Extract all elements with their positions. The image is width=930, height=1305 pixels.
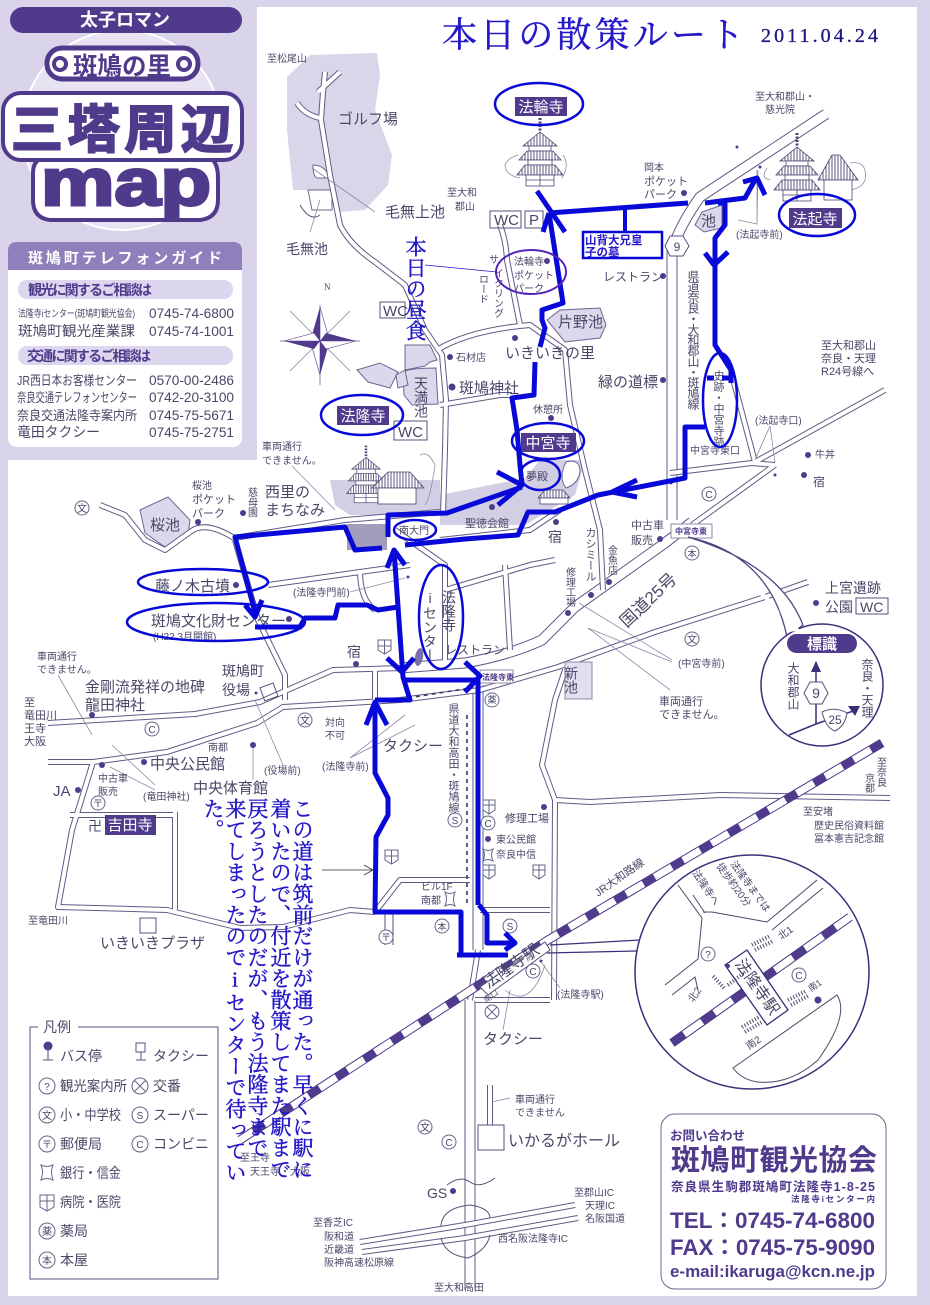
label: Horinji: 法輪寺 <box>518 99 564 116</box>
legend: hospital <box>40 1194 121 1211</box>
panel: contact box: 法隆寺iセンター内 <box>791 1194 875 1204</box>
map labels: north-centre: ポケット <box>644 175 688 188</box>
sightseeing enquiries: 観光に関するご相談は <box>28 282 152 298</box>
map labels: north-east: R24号線へ <box>821 365 874 378</box>
panel: contact box: 奈良県生駒郡斑鳩町法隆寺1-8-25 <box>671 1179 875 1194</box>
map labels: Chuguji east and Route 25: 販売 <box>631 534 653 547</box>
map labels: north-centre: P <box>529 212 539 229</box>
map labels: Chuguji east and Route 25: 本 <box>687 548 697 559</box>
map labels: west: 慈母園 <box>246 486 258 518</box>
map labels: west: 役場 <box>222 682 250 698</box>
map labels: north-east: 県道奈良・大和郡山・斑鳩線 <box>686 270 700 410</box>
map labels: Chuguji east and Route 25: レストラン <box>445 643 505 657</box>
map labels: west: まちなみ <box>265 502 325 519</box>
map labels: north-centre: サ <box>486 254 498 264</box>
badge: 斑鳩の里 <box>47 48 198 81</box>
map labels: south-centre: GS <box>427 1185 447 1201</box>
map labels: south-centre: 阪和道 <box>324 1230 354 1243</box>
legend: convenience store: コンビニ <box>153 1136 209 1152</box>
map labels: north-west <box>267 52 519 441</box>
banner: 太子ロマン <box>10 7 242 33</box>
map labels: Chuguji east and Route 25: 薬 <box>487 694 497 705</box>
route stop ring: Chuguji <box>512 423 584 459</box>
transport enquiries: 0745-75-2751 <box>149 424 234 440</box>
callout: road sign inset: 大和郡山 <box>786 662 800 710</box>
map labels: Horyuji precinct: iセンター <box>422 590 438 662</box>
banner: 太子ロマン: 太子ロマン <box>80 10 170 30</box>
map labels: north-east: 至大和郡山 <box>821 338 876 352</box>
map labels: west: 竜田川 <box>24 709 57 722</box>
railway: JR Yamatoji line <box>240 743 882 1140</box>
map labels: north-centre: レストラン <box>603 270 663 284</box>
map labels: north-east: 池 <box>701 213 716 230</box>
title: map: map <box>41 145 211 219</box>
map labels: north-centre: 法輪寺 <box>514 256 544 268</box>
map labels: south-west: 対向 <box>325 716 345 729</box>
map labels: north-east: C <box>705 490 713 501</box>
sightseeing enquiries: 法隆寺iセンター(斑鳩町観光協会) <box>18 307 135 320</box>
map labels: Chuguji east and Route 25: 中古車 <box>631 518 664 532</box>
legend: bookstore <box>39 1252 88 1268</box>
map labels: west: 南都 <box>208 741 228 754</box>
map labels: south-centre: 南都 <box>421 894 441 907</box>
panel: contact box: お問い合わせ <box>670 1128 745 1143</box>
map labels: north-west: WC <box>398 424 423 441</box>
map labels: west: C <box>148 725 156 736</box>
panel: contact box: TEL：0745-74-6800 <box>670 1208 875 1233</box>
map labels: north-centre: イクリング <box>492 268 504 318</box>
temple illustration: Horyuji pagoda and hall <box>347 446 435 505</box>
transport enquiries: 奈良交通テレフォンセンター <box>17 390 137 405</box>
map labels: Chuguji east and Route 25 <box>445 504 888 721</box>
map labels: south-centre: ビル1F <box>421 881 453 893</box>
map labels: north-centre <box>476 161 688 483</box>
legend: pharmacy: 薬局 <box>60 1223 88 1239</box>
panel: contact box: FAX：0745-75-9090 <box>670 1235 875 1260</box>
legend: pharmacy: 薬 <box>42 1226 52 1238</box>
map labels: south-west: 至竜田川 <box>28 915 68 927</box>
route stop ring: Fujinoki tumulus <box>138 569 268 595</box>
map labels: north-east: 慈光院 <box>765 103 795 116</box>
callout: Horyuji station inset: ? <box>705 950 711 961</box>
map labels: west: 文 <box>300 714 310 727</box>
walking route: blue hand-drawn path <box>235 178 765 955</box>
map labels: Chuguji east and Route 25: カシミール <box>584 527 596 582</box>
callout: Horyuji station inset: 徒歩約20分 <box>714 860 754 909</box>
sightseeing enquiries <box>18 280 234 339</box>
legend: hospital: 病院・医院 <box>60 1194 121 1210</box>
map labels: north-east: (法起寺口) <box>755 415 802 427</box>
map labels: north-west: 斑鳩神社 <box>459 380 519 397</box>
annotation: Prince Yamashiro no Oe tomb <box>583 208 662 259</box>
map labels: north-east: 中宮寺東口 <box>690 444 740 457</box>
map labels: Chuguji east and Route 25: できません。 <box>659 708 725 721</box>
map labels: Chuguji east and Route 25: (中宮寺前) <box>678 657 725 670</box>
map labels: north-centre: WC <box>494 212 519 229</box>
map labels: south-west: いきいきプラザ <box>100 935 205 952</box>
sign title <box>787 634 857 653</box>
route stop ring: Chuguji ruins <box>703 353 737 447</box>
map labels: south-west <box>28 700 443 952</box>
legend: convenience store: C <box>136 1140 144 1151</box>
map labels: north-west: ゴルフ場 <box>338 110 398 128</box>
annotation: today's lunch <box>403 236 497 341</box>
label: Chuguji: 中宮寺 <box>525 435 571 452</box>
annotation: walking note: 着いたので、付近を散策してまた駅まで <box>268 798 292 1180</box>
sightseeing enquiries: 0745-74-1001 <box>149 323 234 339</box>
map labels: west: 大阪 <box>24 734 46 748</box>
route stop ring: lunch pocket park <box>496 250 566 294</box>
map labels: south-centre: 近畿道 <box>324 1243 354 1256</box>
map labels: west: 桜池 <box>150 517 180 534</box>
panel: contact box: 斑鳩町観光協会 <box>671 1144 877 1177</box>
legend: pharmacy <box>39 1223 88 1239</box>
map labels: Chuguji east and Route 25: 金魚店 <box>606 544 618 576</box>
map labels: south-centre: 至郡山IC <box>574 1187 614 1199</box>
map labels: south-centre: いかるがホール <box>508 1132 620 1150</box>
route stop ring: Horinji <box>495 83 583 125</box>
map labels: Chuguji east and Route 25: 修理工場 <box>564 566 576 608</box>
route stop ring: Yumedono <box>520 460 560 490</box>
legend: bank <box>41 1165 121 1181</box>
annotation: walking note: 戻ろうとしたのだが、もう法隆寺まで <box>245 798 269 1158</box>
map labels: west: できません。 <box>37 664 97 676</box>
annotation: today's lunch: 本日の昼食 <box>403 236 427 341</box>
map labels: west: 藤ノ木古墳 <box>155 578 230 595</box>
map labels: south-west: 〒 <box>93 799 103 810</box>
compass rose <box>280 282 360 385</box>
panel: legend <box>30 1019 218 1279</box>
legend: taxi: タクシー <box>153 1048 209 1064</box>
legend: post office <box>39 1136 102 1152</box>
callout: Horyuji station inset: 北2 <box>686 985 705 1005</box>
map labels: west: パーク <box>192 507 225 520</box>
map labels: south-centre: 至奈良 <box>874 757 886 788</box>
callout: Horyuji station inset: 法隆寺へ <box>690 867 723 908</box>
map labels: west: 桜池 <box>192 479 212 492</box>
legend: post office: 郵便局 <box>60 1136 102 1152</box>
map labels: south-west: 販売 <box>98 785 118 798</box>
map labels: west: 車両通行 <box>37 650 77 663</box>
map labels: Horyuji precinct: 宿 <box>347 644 361 660</box>
map labels: south-west: (竜田神社) <box>143 790 190 803</box>
map labels: north-west: 郡山 <box>455 201 475 213</box>
label: Hokiji: 法起寺 <box>792 211 838 228</box>
legend: bookstore: 本 <box>42 1254 52 1267</box>
guide header: 斑鳩町テレフォンガイド <box>28 249 222 267</box>
map labels: south-west: 卍 <box>88 818 102 834</box>
map labels: north-east: 9 <box>674 240 681 254</box>
label: Horyuji: 法隆寺 <box>340 408 386 425</box>
panel: logo <box>3 7 242 230</box>
transport enquiries: 0742-20-3100 <box>149 389 234 405</box>
transport enquiries: 交通に関するご相談は <box>27 348 151 364</box>
legend: bookstore: 本屋 <box>60 1252 88 1268</box>
map labels: south-centre: 奈良中信 <box>496 848 536 861</box>
temple illustration: Horinji pagoda <box>505 118 566 186</box>
map labels: south-west: JA <box>53 783 71 800</box>
route stop ring: Ikaruga cultural centre <box>127 603 305 641</box>
map labels: north-west: 毛無上池 <box>385 204 445 221</box>
map labels: Horyuji precinct: 法隆寺 <box>441 590 457 632</box>
map labels: north-east: (法起寺前) <box>736 228 783 241</box>
map labels: south-centre: 名阪国道 <box>585 1212 625 1225</box>
logo backdrop circle <box>22 30 222 230</box>
map labels: north-centre: パーク <box>644 188 677 201</box>
legend: school <box>39 1107 121 1123</box>
map labels: north-centre: 夢殿 <box>526 470 548 483</box>
map labels: north-west: WC <box>383 303 408 320</box>
map labels: Chuguji east and Route 25: 国道25号 <box>616 570 680 631</box>
transport enquiries: 奈良交通法隆寺案内所 <box>17 408 137 423</box>
map labels: west: ポケット <box>192 493 236 506</box>
callout: Horyuji station inset: 法隆寺駅 <box>731 956 783 1018</box>
callout: road sign inset: 9 <box>812 685 820 701</box>
map labels: west <box>24 479 325 780</box>
map labels: north-centre: ロード <box>476 274 488 304</box>
map labels: south-centre: 西名阪法隆寺IC <box>498 1232 568 1245</box>
panel: telephone guide <box>8 242 242 447</box>
map labels: west: 金剛流発祥の地碑 <box>85 679 205 696</box>
annotation: walking note: た。 <box>201 798 225 840</box>
legend: bus stop: バス停 <box>60 1048 102 1064</box>
map labels: south-centre: 至王寺 <box>240 1152 270 1164</box>
map labels: south-west: 中央公民館 <box>150 756 225 773</box>
map labels: south-west: (役場前) <box>264 764 301 777</box>
route stop ring: Nandaimon <box>394 520 436 540</box>
legend: police box <box>132 1078 181 1094</box>
map labels: south-centre <box>240 757 886 1294</box>
map labels: south-centre: 至大和高田 <box>434 1281 484 1294</box>
route stop ring: Horyuji i-centre <box>419 565 463 669</box>
map labels: Chuguji east and Route 25: 法隆寺東 <box>482 672 514 682</box>
map labels: north-west: 石材店 <box>456 351 486 364</box>
map labels: Horyuji precinct <box>262 440 462 827</box>
badge: 斑鳩の里: 斑鳩の里 <box>73 53 171 81</box>
map labels: north-east <box>665 90 876 501</box>
map labels: north-centre: いきいきの里 <box>505 345 595 362</box>
sign title: 標識 <box>807 635 837 653</box>
map labels: south-centre: タクシー <box>483 1031 543 1048</box>
panel: contact box: e-mail:ikaruga@kcn.ne.jp <box>670 1263 875 1281</box>
annotation: walking note <box>201 798 373 1183</box>
map labels: Chuguji east and Route 25: 上宮遺跡 <box>825 580 881 596</box>
map labels: south-centre: できません <box>515 1107 565 1119</box>
map labels: Chuguji east and Route 25: 文 <box>687 633 697 646</box>
map labels: south-centre: C <box>529 967 537 978</box>
map labels: south-centre: 至香芝IC <box>313 1217 353 1229</box>
map areas: golf course, ponds and temple precincts <box>140 53 722 550</box>
map labels: west: 王寺 <box>24 722 46 735</box>
route arrowheads <box>245 178 765 950</box>
map labels: south-centre: 法隆寺駅 <box>480 941 543 992</box>
map labels: north-centre: 緑の道標 <box>598 374 658 391</box>
map labels: south-west: 〒 <box>381 933 391 944</box>
legend: school: 文 <box>42 1109 52 1122</box>
label: Yoshidadera: 吉田寺 <box>107 817 153 834</box>
map labels: west: 斑鳩文化財センター <box>151 613 286 630</box>
map labels: Horyuji precinct: S <box>452 816 459 827</box>
legend: supermarket: スーパー <box>153 1107 209 1123</box>
map labels: south-centre: 修理工場 <box>505 811 549 825</box>
map labels: west: 龍田神社 <box>85 697 145 714</box>
sightseeing enquiries: 0745-74-6800 <box>149 305 234 321</box>
map labels: north-centre: ポケット <box>514 270 554 282</box>
map labels: south-west: タクシー <box>383 738 443 755</box>
callout: road sign inset: 25 <box>828 713 842 727</box>
map labels: south-centre: 南口 <box>481 987 500 1005</box>
inset railway <box>672 917 850 1043</box>
map labels: Horyuji precinct: 車両通行 <box>262 440 302 453</box>
map labels: north-centre: 片野池 <box>558 314 603 331</box>
map labels: south-centre: C <box>445 1138 453 1149</box>
annotation: walking note: 来てしまったのでiセンターで待ってい <box>223 798 247 1183</box>
map labels: Horyuji precinct: 南大門 <box>399 524 429 537</box>
map labels: north-east: 牛丼 <box>815 448 835 461</box>
title: today's walking route: 本日の散策ルート <box>442 16 744 55</box>
callout: Horyuji station inset: 南1 <box>806 977 824 994</box>
callout: road sign inset: 奈良・天理 <box>860 658 874 718</box>
legend: supermarket: S <box>137 1111 144 1122</box>
map labels: north-east: 奈良・天理 <box>821 351 876 365</box>
route stop ring: Horyuji <box>321 395 403 435</box>
temple illustration: Yumedono hall and statue <box>538 461 580 504</box>
map labels: south-centre: 京都 <box>862 773 874 794</box>
map labels: south-centre: 歴史民俗資料館 <box>814 819 884 832</box>
map labels: south-centre: 天理IC <box>585 1200 615 1212</box>
map labels: Horyuji precinct: できません。 <box>262 455 322 467</box>
map labels: south-centre: (法隆寺駅) <box>557 988 604 1001</box>
callout: Horyuji station inset: 法隆寺までは <box>728 858 773 914</box>
map labels: west: 至 <box>24 697 35 709</box>
map labels: south-centre: 冨本憲吉記念館 <box>814 832 884 845</box>
map labels: south-centre: JR大和路線 <box>592 855 647 899</box>
callout: Horyuji station inset: 南2 <box>743 1033 764 1052</box>
map labels: Chuguji east and Route 25: 宿 <box>548 529 562 545</box>
map labels: north-west: 毛無池 <box>286 241 328 257</box>
transport enquiries: 0570-00-2486 <box>149 372 234 388</box>
sightseeing enquiries: 斑鳩町観光産業課 <box>18 323 135 339</box>
map labels: west: (H22.3月開館) <box>153 630 216 643</box>
map labels: Chuguji east and Route 25: 聖徳会館 <box>465 517 509 530</box>
map labels: north-centre: 岡本 <box>644 161 664 174</box>
transport enquiries: 竜田タクシー <box>17 424 100 440</box>
annotation: Prince Yamashiro no Oe tomb: 子の墓 <box>585 245 620 259</box>
title: 三塔周辺: 三塔周辺 <box>11 102 233 160</box>
temple illustration: Hokiji pagoda and hall <box>764 133 865 201</box>
map labels: north-east: 宿 <box>813 475 825 489</box>
legend: information: 観光案内所 <box>60 1078 127 1094</box>
map labels: south-west: 中央体育館 <box>193 780 268 797</box>
map labels: west: 斑鳩町 <box>222 663 264 679</box>
legend: information: ? <box>44 1082 50 1093</box>
transport enquiries: 0745-75-5671 <box>149 407 234 423</box>
callout: Horyuji station inset <box>547 855 869 1089</box>
map labels: north-centre: 休憩所 <box>533 403 563 416</box>
map labels: Chuguji east and Route 25: 公園 <box>825 599 853 615</box>
transport enquiries <box>17 346 234 440</box>
callout: Horyuji station inset: 北1 <box>776 923 796 942</box>
legend: school: 小・中学校 <box>60 1107 121 1123</box>
map labels: north-west: 至松尾山 <box>267 52 307 65</box>
map labels: south-centre: 至安堵 <box>803 805 833 818</box>
map labels: south-centre: 文 <box>420 1121 430 1134</box>
map labels: north-west: 天満池 <box>413 376 429 418</box>
map labels: south-centre: 車両通行 <box>515 1093 555 1106</box>
map labels: south-centre: S <box>507 922 514 933</box>
map labels: south-centre: 本 <box>437 921 447 932</box>
route stop ring: Hokiji <box>779 194 855 236</box>
map labels: Chuguji east and Route 25: WC <box>860 599 883 615</box>
map labels: south-centre: 東公民館 <box>496 833 536 846</box>
legend: bus stop <box>43 1042 102 1064</box>
map labels: Chuguji east and Route 25: 中宮寺東 <box>675 526 707 536</box>
annotation: Prince Yamashiro no Oe tomb: 山背大兄皇 <box>585 233 642 247</box>
compass rose: N <box>324 282 331 292</box>
legend: police box: 交番 <box>153 1078 181 1094</box>
legend: taxi <box>136 1043 209 1064</box>
map labels: south-west: 中古車 <box>98 772 128 785</box>
guide header <box>8 242 242 270</box>
map labels: south-centre: C <box>484 819 492 830</box>
map labels: north-west: 至大和 <box>447 186 477 199</box>
annotation: walking note: この道は筑前だけが通った。早くに駅に <box>290 798 314 1180</box>
map labels: Chuguji east and Route 25: 新池 <box>563 666 579 694</box>
panel: contact box <box>661 1114 886 1289</box>
callout: road sign inset <box>688 537 883 746</box>
map labels: north-east: 至大和郡山・ <box>755 90 815 103</box>
map labels: south-west: 不可 <box>325 731 345 742</box>
map labels: west: 西里の <box>265 484 310 501</box>
map labels: north-east: 史跡・中宮寺跡 <box>712 370 724 448</box>
panel: legend: 凡例 <box>43 1019 71 1035</box>
map labels: south-west: (法隆寺前) <box>322 760 369 773</box>
map labels: Horyuji precinct: 県道大和高田・斑鳩線 <box>447 703 460 813</box>
map labels: south-centre: 阪神高速松原線 <box>324 1256 394 1269</box>
map labels: north-centre: パーク <box>514 283 544 295</box>
map labels: south-centre: 天王寺・大阪 <box>250 1165 310 1178</box>
map labels: Horyuji precinct: (法隆寺門前) <box>293 586 350 599</box>
transport enquiries: JR西日本お客様センター <box>17 373 137 388</box>
legend: post office: 〒 <box>42 1140 52 1151</box>
callout: Horyuji station inset: C <box>795 971 803 982</box>
map labels: west: 文 <box>77 502 87 515</box>
date: 2011.04.24 <box>761 25 878 47</box>
legend: bank: 銀行・信金 <box>60 1165 121 1181</box>
map labels: Chuguji east and Route 25: 車両通行 <box>659 694 703 708</box>
